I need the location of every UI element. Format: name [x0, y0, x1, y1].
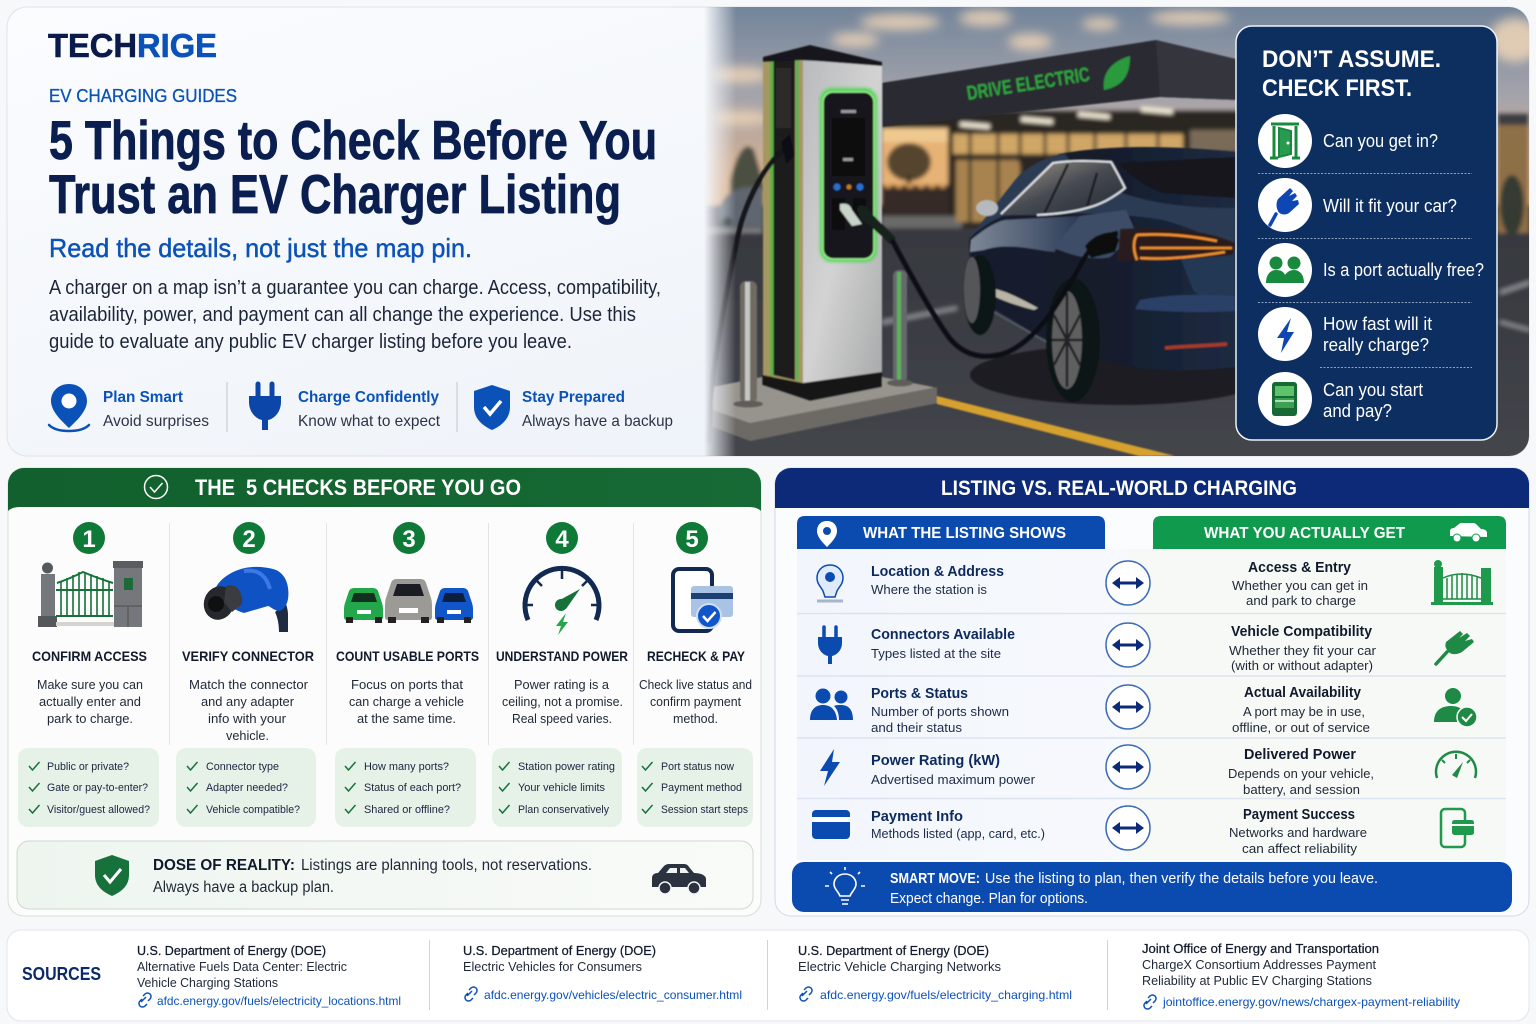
check 2: verify connector: vehicle. — [226, 728, 269, 743]
check 2: verify connector: Match the connector — [189, 677, 309, 692]
checklist 4: Plan conservatively — [518, 804, 609, 816]
panel header — [8, 468, 761, 511]
check 2: verify connector: info with your — [208, 711, 287, 726]
ground lines — [882, 304, 960, 328]
check 1: confirm access: actually enter and — [39, 694, 141, 709]
row: connectors: Vehicle Compatibility — [1231, 623, 1373, 640]
panel header: LISTING VS. REAL-WORLD CHARGING — [941, 477, 1297, 500]
icon: green gauge — [1436, 752, 1476, 778]
callout: smart move: Expect change. Plan for options. — [890, 890, 1088, 907]
row: connectors: Types listed at the site — [871, 646, 1001, 661]
brand logo: TECHRIGE — [48, 27, 217, 64]
check 4: understand power: 4 — [555, 526, 569, 553]
checklist 4: Station power rating — [518, 761, 615, 773]
arrow: location — [1106, 561, 1150, 605]
question: can you get in: Can you get in? — [1323, 131, 1438, 151]
row: ports: offline, or out of service — [1232, 720, 1370, 735]
panel heading: CHECK FIRST. — [1262, 75, 1412, 102]
taillight — [1118, 228, 1235, 261]
checklist 1 — [18, 748, 159, 827]
row: payment: can affect reliability — [1242, 841, 1358, 856]
check 4: understand power: UNDERSTAND POWER — [496, 648, 628, 664]
question: how fast: How fast will it — [1323, 314, 1432, 334]
panel heading: DON’T ASSUME. — [1262, 46, 1441, 73]
checklist 1: Public or private? — [47, 761, 129, 773]
icon: green plug — [1436, 631, 1474, 664]
panel heading — [1262, 46, 1441, 102]
front wheel — [964, 255, 996, 335]
question: is a port free: Is a port actually free? — [1323, 260, 1484, 280]
checklist 3: How many ports? — [364, 761, 449, 773]
check 1: confirm access: Make sure you can — [37, 677, 143, 692]
benefit: plan smart: Avoid surprises — [103, 413, 209, 430]
callout: dose of reality: Listings are planning tools, not reservations. — [301, 857, 592, 874]
check 1: confirm access: CONFIRM ACCESS — [32, 648, 147, 664]
benefit: plan smart — [49, 384, 209, 431]
source 1 — [137, 943, 401, 1008]
panel: listing vs real-world — [775, 468, 1529, 916]
source 2: afdc.energy.gov/vehicles/electric_consumer.html — [484, 988, 742, 1002]
column header: listing shows — [797, 516, 1105, 549]
callout: dose of reality: DOSE OF REALITY: — [153, 857, 295, 874]
row: location — [817, 559, 1493, 608]
sources label: SOURCES — [22, 964, 101, 984]
icon: location bulb — [817, 565, 843, 601]
checklist 4 — [492, 748, 622, 827]
checklist 2: Connector type — [206, 761, 279, 773]
source 1: Vehicle Charging Stations — [137, 975, 278, 990]
check 3: count usable ports: at the same time. — [357, 711, 456, 726]
arrow: payment — [1106, 806, 1150, 850]
row: ports: and their status — [871, 720, 963, 735]
store sign: DRIVE ELECTRIC — [965, 64, 1091, 105]
icon: three cars — [344, 579, 473, 623]
icon: green gate — [1431, 560, 1493, 605]
row: ports: Actual Availability — [1244, 684, 1362, 701]
checklist 5 — [637, 748, 753, 827]
title: 5 Things to Check Before You — [49, 109, 657, 171]
check 4: understand power: Real speed varies. — [512, 711, 612, 726]
checklist 5: Payment method — [661, 782, 742, 794]
column header: listing shows: WHAT THE LISTING SHOWS — [863, 525, 1066, 542]
checklist 3: Status of each port? — [364, 782, 461, 794]
checklist 3 — [335, 748, 476, 827]
question: start and pay — [1258, 372, 1423, 426]
icon: bolt — [820, 749, 840, 786]
row: connectors: Whether they fit your car — [1229, 643, 1377, 658]
check 3: count usable ports: Focus on ports that — [351, 677, 463, 692]
icon: card — [812, 810, 850, 839]
check 4: understand power — [492, 522, 628, 827]
question: start and pay: Can you start — [1323, 380, 1423, 400]
panel header — [775, 468, 1529, 508]
icon: connector — [199, 567, 288, 632]
row: payment: Payment Info — [871, 808, 963, 825]
row: payment: Methods listed (app, card, etc.) — [871, 826, 1045, 841]
check 1: confirm access — [18, 522, 159, 827]
check 5: recheck and pay: confirm payment — [650, 694, 741, 709]
source 1: U.S. Department of Energy (DOE) — [137, 943, 326, 958]
icon: people — [810, 688, 853, 720]
checklist 1: Gate or pay-to-enter? — [47, 782, 148, 794]
row: power: Depends on your vehicle, — [1228, 766, 1374, 781]
check 3: count usable ports: COUNT USABLE PORTS — [336, 648, 479, 664]
callout: smart move: Use the listing to plan, then verify the details before you leave. — [985, 870, 1378, 887]
source 1: Alternative Fuels Data Center: Electric — [137, 959, 347, 974]
column header: actually get: WHAT YOU ACTUALLY GET — [1204, 525, 1405, 542]
question: how fast — [1258, 307, 1432, 361]
panel: the 5 checks — [8, 468, 761, 916]
check 2: verify connector: and any adapter — [201, 694, 295, 709]
row: location: Location & Address — [871, 563, 1004, 580]
question: start and pay: and pay? — [1323, 401, 1392, 421]
checklist 1: Visitor/guest allowed? — [47, 804, 150, 816]
arrow: power — [1106, 745, 1150, 789]
arrow: ports — [1106, 685, 1150, 729]
benefit: plan smart: Plan Smart — [103, 389, 184, 406]
icon: gauge — [525, 568, 599, 635]
source 4 — [1142, 941, 1460, 1009]
check 2: verify connector — [176, 522, 316, 827]
charger screen — [820, 88, 877, 262]
panel: don't assume, check first — [1236, 26, 1497, 440]
question: can you get in — [1258, 114, 1438, 168]
row: ports: Number of ports shown — [871, 704, 1009, 719]
row: power: Power Rating (kW) — [871, 752, 1000, 769]
source 4: ChargeX Consortium Addresses Payment — [1142, 957, 1376, 972]
store exterior — [881, 110, 1241, 228]
source 3: U.S. Department of Energy (DOE) — [798, 943, 989, 958]
checklist 2: Adapter needed? — [206, 782, 288, 794]
source 1: afdc.energy.gov/fuels/electricity_locations.html — [157, 994, 401, 1008]
bollards — [740, 281, 757, 403]
row: location: Whether you can get in — [1232, 578, 1368, 593]
row: ports — [810, 684, 1477, 735]
arrow: connectors — [1106, 623, 1150, 667]
check 3: count usable ports — [335, 522, 479, 827]
source 4: Reliability at Public EV Charging Stations — [1142, 973, 1372, 988]
callout: dose of reality — [17, 841, 753, 909]
callout: smart move — [792, 862, 1512, 912]
checklist 2: Vehicle compatible? — [206, 804, 300, 816]
check 1: confirm access: 1 — [82, 526, 96, 553]
icon: gate — [38, 561, 143, 627]
benefit: stay prepared — [474, 385, 673, 430]
check 3: count usable ports: 3 — [402, 526, 416, 553]
icon: person check — [1434, 688, 1477, 727]
check 5: recheck and pay: method. — [673, 711, 718, 726]
benefit: charge confidently: Know what to expect — [298, 413, 441, 430]
row: power: Advertised maximum power — [871, 772, 1036, 787]
question: is a port free — [1258, 243, 1484, 297]
source 2: U.S. Department of Energy (DOE) — [463, 943, 656, 958]
source 4: jointoffice.energy.gov/news/chargex-payment-reliability — [1162, 995, 1460, 1009]
row: power — [820, 745, 1476, 797]
row: ports: A port may be in use, — [1243, 704, 1365, 719]
source 2 — [463, 943, 742, 1002]
row: power: battery, and session — [1243, 782, 1360, 797]
car body — [969, 147, 1236, 370]
check 5: recheck and pay: 5 — [685, 526, 699, 553]
icon: plug — [818, 627, 842, 664]
check 5: recheck and pay — [637, 522, 753, 827]
question: will it fit your car — [1258, 178, 1457, 232]
cables — [710, 147, 784, 422]
benefit: stay prepared: Always have a backup — [522, 413, 673, 430]
intro text: A charger on a map isn’t a guarantee you can charge. Access, compatibility, — [49, 277, 661, 299]
check 5: recheck and pay: RECHECK & PAY — [647, 648, 746, 664]
row: payment: Payment Success — [1243, 806, 1355, 823]
row: power: Delivered Power — [1244, 746, 1356, 763]
benefit: charge confidently — [249, 384, 441, 430]
yellow parking line — [937, 396, 1175, 456]
benefit: stay prepared: Stay Prepared — [522, 389, 625, 406]
source 3: Electric Vehicle Charging Networks — [798, 959, 1001, 974]
subtitle: Read the details, not just the map pin. — [49, 233, 472, 263]
benefit: charge confidently: Charge Confidently — [298, 389, 439, 406]
charger left face — [763, 57, 804, 383]
source 4: Joint Office of Energy and Transportation — [1142, 941, 1379, 956]
question: how fast: really charge? — [1323, 335, 1429, 355]
rear wheel — [1046, 278, 1100, 402]
check 3: count usable ports: can charge a vehicle — [349, 694, 464, 709]
row: connectors: (with or without adapter) — [1231, 658, 1373, 673]
check 4: understand power: ceiling, not a promise. — [502, 694, 623, 709]
checklist 2 — [176, 748, 316, 827]
check 2: verify connector: VERIFY CONNECTOR — [182, 648, 314, 664]
column header: actually get — [1153, 516, 1506, 549]
row: ports: Ports & Status — [871, 685, 968, 702]
checklist 4: Your vehicle limits — [518, 782, 605, 794]
row: location: Where the station is — [871, 582, 988, 597]
check 1: confirm access: park to charge. — [47, 711, 133, 726]
row: location: Access & Entry — [1248, 559, 1352, 576]
panel: sources — [7, 930, 1529, 1021]
row: location: and park to charge — [1246, 593, 1356, 608]
car shadow — [970, 348, 1236, 406]
intro text — [49, 277, 661, 353]
icon: phone and card — [673, 569, 733, 631]
source 2: Electric Vehicles for Consumers — [463, 959, 642, 974]
check 5: recheck and pay: Check live status and — [639, 677, 752, 692]
title: Trust an EV Charger Listing — [49, 163, 621, 225]
row: payment — [812, 806, 1474, 856]
check 2: verify connector: 2 — [242, 526, 256, 553]
eyebrow: EV CHARGING GUIDES — [49, 86, 237, 106]
icon: green phone wallet — [1441, 809, 1474, 847]
icon: car — [652, 864, 706, 894]
checklist 5: Port status now — [661, 761, 734, 773]
checklist 5: Session start steps — [661, 804, 748, 816]
row: connectors — [818, 623, 1474, 673]
hero photo: EV charger and car — [700, 0, 1536, 465]
source 3: afdc.energy.gov/fuels/electricity_charging.html — [820, 988, 1072, 1002]
question: will it fit your car: Will it fit your car? — [1323, 196, 1457, 216]
title — [49, 109, 657, 225]
concrete base — [713, 377, 937, 440]
panel header: THE 5 CHECKS BEFORE YOU GO — [195, 475, 521, 500]
store fascia — [881, 40, 1240, 127]
intro text: availability, power, and payment can all change the experience. Use this — [49, 304, 636, 326]
callout: dose of reality: Always have a backup plan. — [153, 879, 334, 896]
charger front — [803, 61, 882, 383]
callout: smart move: SMART MOVE: — [890, 870, 980, 887]
row: connectors: Connectors Available — [871, 626, 1015, 643]
panel: hero — [7, 0, 1536, 465]
source 3 — [798, 943, 1072, 1002]
check 4: understand power: Power rating is a — [514, 677, 610, 692]
checklist 3: Shared or offline? — [364, 804, 450, 816]
row: payment: Networks and hardware — [1229, 825, 1367, 840]
intro text: guide to evaluate any public EV charger listing before you leave. — [49, 331, 572, 353]
